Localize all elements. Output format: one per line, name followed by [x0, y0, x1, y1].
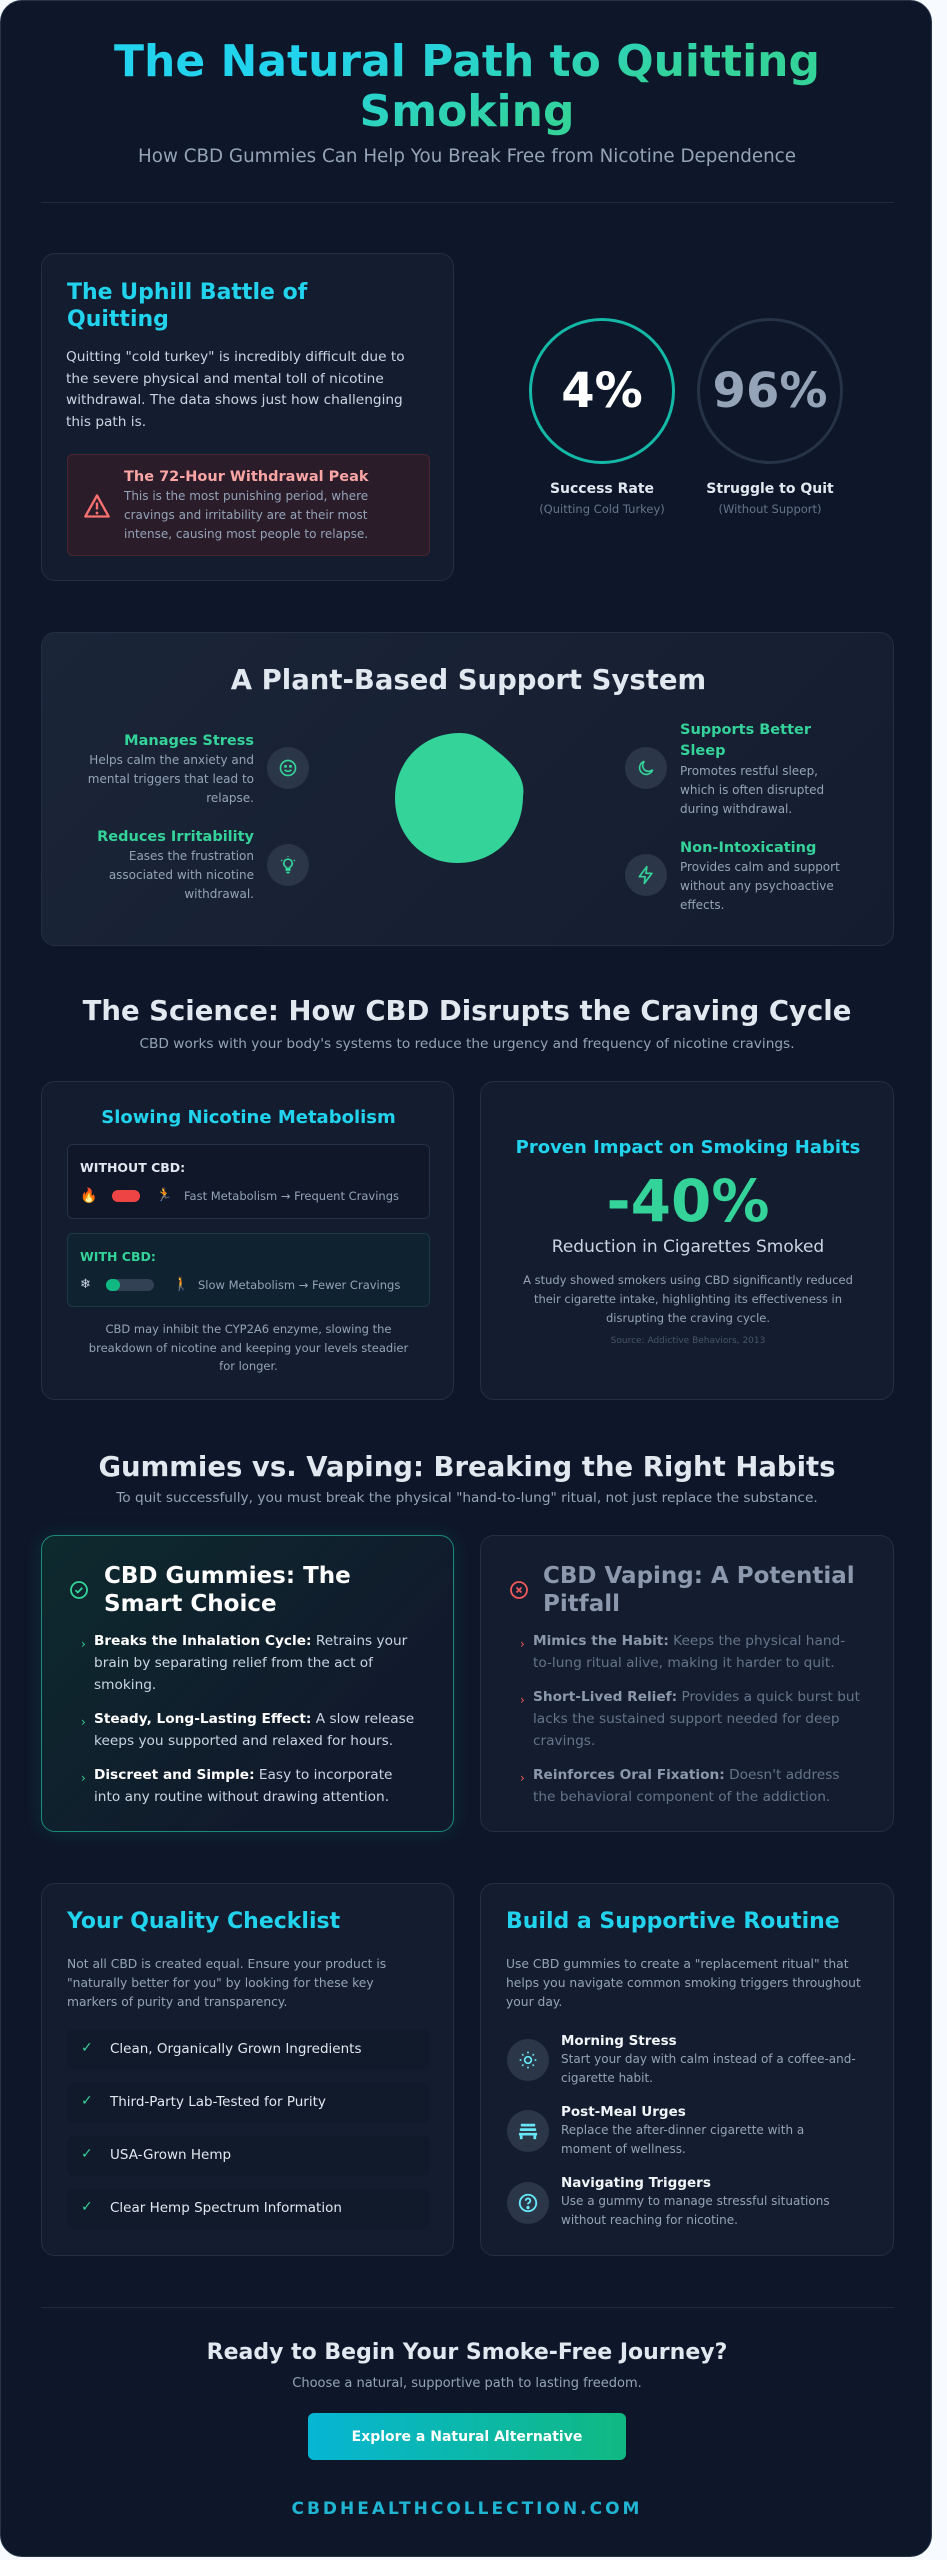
bullets: to-lung ritual alive, making it harder to quit. — [533, 1655, 835, 1671]
feature: manages stress: mental triggers that lead to — [88, 772, 254, 786]
feature: better sleep: during withdrawal. — [680, 802, 792, 816]
feature: non-intoxicating: Non-Intoxicating — [680, 840, 816, 856]
box: without cbd — [67, 1144, 430, 1219]
text: their cigarette intake, highlighting its effectiveness in — [534, 1292, 842, 1306]
routine: morning: Start your day with calm instead of a coffee-and- — [561, 2052, 856, 2066]
feature: manages stress: Helps calm the anxiety and — [89, 753, 254, 767]
heading — [104, 1563, 351, 1617]
bullets: Short-Lived Relief: Provides a quick burst but — [533, 1689, 860, 1705]
routine: post-meal: Replace the after-dinner cigarette with a — [561, 2123, 804, 2137]
stat: -40%: -40% — [607, 1167, 769, 1235]
footnote: CBD may inhibit the CYP2A6 enzyme, slowing the — [106, 1322, 391, 1336]
text: uphill body: this path is. — [66, 414, 146, 430]
callout text: intense, causing most people to relapse. — [124, 527, 368, 541]
icon: sun — [507, 2039, 549, 2081]
panel: uphill battle — [41, 253, 454, 581]
item: spectrum: Clear Hemp Spectrum Information — [110, 2200, 342, 2216]
text: Use CBD gummies to create a "replacement ritual" that — [506, 1957, 849, 1971]
box: with cbd: 🚶 — [173, 1277, 189, 1292]
bullets: Discreet and Simple: Easy to incorporate — [94, 1767, 392, 1783]
feature: better sleep: Promotes restful sleep, — [680, 764, 818, 778]
bullets — [520, 1633, 860, 1805]
title — [1, 37, 933, 137]
heading: uphill: Quitting — [67, 307, 169, 332]
footnote: for longer. — [219, 1359, 278, 1373]
icon: moon — [625, 747, 667, 789]
feature: better sleep: which is often disrupted — [680, 783, 824, 797]
routine: morning: Morning Stress — [561, 2033, 677, 2049]
icon: question — [507, 2182, 549, 2224]
text: uphill body: Quitting "cold turkey" is incredibly difficult due to — [66, 349, 405, 365]
icon: smile — [267, 747, 309, 789]
callout title: The 72-Hour Withdrawal Peak — [124, 469, 369, 485]
subheading: To quit successfully, you must break the physical "hand-to-lung" ritual, not just replace the substance. — [116, 1490, 818, 1506]
bullets: Breaks the Inhalation Cycle: Retrains your — [94, 1633, 407, 1649]
feature: manages stress — [88, 733, 254, 805]
bullets: Steady, Long-Lasting Effect: A slow release — [94, 1711, 414, 1727]
stat: 4% success: 4% — [561, 363, 643, 419]
footer url: CBDHEALTHCOLLECTION.COM — [292, 2499, 642, 2519]
text: "naturally better for you" by looking for these key — [67, 1976, 374, 1990]
box: without cbd: 🏃 — [156, 1188, 172, 1203]
subtitle: How CBD Gummies Can Help You Break Free from Nicotine Dependence — [138, 146, 796, 167]
feature: non-intoxicating: effects. — [680, 898, 724, 912]
subheading: science: CBD works with your body's systems to reduce the urgency and frequency of nicotine cravings. — [139, 1036, 795, 1052]
box: with cbd: ❄ — [80, 1277, 91, 1292]
routine: triggers: without reaching for nicotine. — [561, 2213, 738, 2227]
text — [506, 1957, 861, 2009]
item: organic — [67, 2030, 430, 2070]
icon: x circle — [510, 1581, 528, 1599]
feature: reduces irritability — [97, 829, 254, 901]
routine: morning — [561, 2033, 856, 2085]
callout text: This is the most punishing period, where — [124, 489, 368, 503]
bullets: the behavioral component of the addiction. — [533, 1789, 830, 1805]
bullets: lacks the sustained support needed for deep — [533, 1711, 840, 1727]
label: struggle: (Without Support) — [718, 502, 822, 516]
heading: Pitfall — [543, 1591, 620, 1617]
heading: Slowing Nicotine Metabolism — [101, 1107, 396, 1128]
item: lab tested: ✓ — [81, 2093, 93, 2109]
heading: CBD Gummies: The — [104, 1563, 351, 1589]
routine: post-meal — [561, 2104, 804, 2156]
routine: triggers: Use a gummy to manage stressful situations — [561, 2194, 830, 2208]
feature: non-intoxicating: Provides calm and support — [680, 860, 840, 874]
feature: manages stress: Manages Stress — [124, 733, 254, 749]
item: organic: Clean, Organically Grown Ingredients — [110, 2041, 362, 2057]
text: helps you navigate common smoking triggers throughout — [506, 1976, 861, 1990]
panel: cbd gummies: › — [81, 1715, 86, 1729]
feature: better sleep: Sleep — [680, 743, 725, 759]
text: your day. — [506, 1995, 562, 2009]
source: Source: Addictive Behaviors, 2013 — [611, 1336, 765, 1346]
item: lab tested — [67, 2083, 430, 2123]
item: organic: ✓ — [81, 2040, 93, 2056]
label: struggle: Struggle to Quit — [706, 481, 834, 497]
panel: supportive routine — [480, 1883, 894, 2256]
feature: non-intoxicating: without any psychoactive — [680, 879, 834, 893]
footnote — [89, 1322, 408, 1373]
stat label: Reduction in Cigarettes Smoked — [552, 1237, 824, 1257]
heading: uphill: The Uphill Battle of — [67, 280, 307, 305]
bullets: Mimics the Habit: Keeps the physical hand- — [533, 1633, 845, 1649]
item: spectrum: ✓ — [81, 2199, 93, 2215]
heading: uphill — [67, 280, 308, 332]
bullets — [81, 1633, 414, 1805]
icon: plant blob — [395, 733, 524, 863]
footnote: breakdown of nicotine and keeping your levels steadier — [89, 1340, 408, 1354]
icon: warning — [84, 494, 110, 518]
panel: cbd vaping: › — [520, 1771, 525, 1785]
bullets: brain by separating relief from the act of — [94, 1655, 373, 1671]
text: markers of purity and transparency. — [67, 1995, 287, 2009]
box: with cbd — [67, 1233, 430, 1307]
routine: triggers — [561, 2175, 830, 2227]
callout text: cravings and irritability are at their most — [124, 508, 367, 522]
heading — [543, 1563, 855, 1617]
box: without cbd: WITHOUT CBD: — [80, 1160, 185, 1175]
feature: non-intoxicating — [680, 840, 840, 912]
label: struggle — [706, 481, 834, 516]
button — [308, 2413, 626, 2460]
feature: better sleep: Supports Better — [680, 722, 811, 738]
icon: check circle — [70, 1581, 88, 1599]
feature: reduces irritability: associated with nicotine — [109, 868, 254, 882]
heading: Build a Supportive Routine — [506, 1909, 840, 1934]
panel: cbd vaping — [480, 1535, 894, 1832]
routine: post-meal: Post-Meal Urges — [561, 2104, 686, 2120]
bullets: cravings. — [533, 1733, 595, 1749]
text: Not all CBD is created equal. Ensure your product is — [67, 1957, 386, 1971]
heading: Your Quality Checklist — [67, 1909, 340, 1934]
cta heading: Ready to Begin Your Smoke-Free Journey? — [207, 2340, 727, 2365]
text — [523, 1273, 853, 1325]
heading: science: The Science: How CBD Disrupts the Craving Cycle — [83, 995, 851, 1027]
panel: cbd vaping: › — [520, 1693, 525, 1707]
bullets: keeps you supported and relaxed for hours. — [94, 1733, 393, 1749]
feature: manages stress: relapse. — [206, 791, 254, 805]
bullets: Reinforces Oral Fixation: Doesn't address — [533, 1767, 839, 1783]
routine: triggers: Navigating Triggers — [561, 2175, 711, 2191]
heading: Proven Impact on Smoking Habits — [516, 1137, 860, 1158]
panel: cbd gummies: › — [81, 1771, 86, 1785]
cta subtext: Choose a natural, supportive path to lasting freedom. — [292, 2376, 642, 2391]
routine: post-meal: moment of wellness. — [561, 2142, 686, 2156]
feature: reduces irritability: withdrawal. — [184, 887, 254, 901]
feature: better sleep — [680, 722, 824, 816]
callout text — [124, 489, 368, 541]
bullets: into any routine without drawing attention. — [94, 1789, 389, 1805]
heading: gummies vs vaping: Gummies vs. Vaping: Breaking the Right Habits — [98, 1451, 836, 1483]
feature: reduces irritability: Eases the frustration — [129, 849, 254, 863]
stat: 96% struggle — [697, 318, 843, 464]
panel: cbd gummies: › — [81, 1637, 86, 1651]
text: uphill body: the severe physical and mental toll of nicotine — [66, 371, 384, 387]
icon: bulb — [267, 844, 309, 886]
button: Explore a Natural Alternative — [352, 2428, 582, 2444]
heading: A Plant-Based Support System — [231, 664, 706, 696]
item: usa hemp: USA-Grown Hemp — [110, 2147, 231, 2163]
callout: 72-hour peak — [67, 454, 430, 556]
label: success rate: (Quitting Cold Turkey) — [539, 502, 665, 516]
label: success rate — [539, 481, 665, 516]
feature: reduces irritability: Reduces Irritability — [97, 829, 254, 845]
panel: slowing metabolism — [41, 1081, 454, 1400]
text: uphill body — [66, 349, 405, 430]
text — [67, 1957, 386, 2009]
box: with cbd: Slow Metabolism → Fewer Cravings — [198, 1278, 400, 1292]
panel: proven impact — [480, 1081, 894, 1400]
heading: Smart Choice — [104, 1591, 277, 1617]
title: The Natural Path to Quitting — [114, 36, 820, 87]
routine: morning: cigarette habit. — [561, 2071, 653, 2085]
box: without cbd: 🔥 — [80, 1188, 97, 1204]
title: Smoking — [360, 86, 574, 137]
panel: plant-based support — [41, 632, 894, 946]
item: usa hemp — [67, 2136, 430, 2176]
box: without cbd: Fast Metabolism → Frequent Cravings — [184, 1189, 399, 1203]
label: success rate: Success Rate — [550, 481, 654, 497]
stat: 96% struggle: 96% — [713, 363, 827, 419]
item: usa hemp: ✓ — [81, 2146, 93, 2162]
icon: meal — [507, 2110, 549, 2152]
icon: bolt — [625, 854, 667, 896]
text: uphill body: withdrawal. The data shows just how challenging — [66, 392, 403, 408]
stat: 4% success — [529, 318, 675, 464]
box: with cbd: WITH CBD: — [80, 1249, 156, 1264]
item: lab tested: Third-Party Lab-Tested for Purity — [110, 2094, 326, 2110]
panel: quality checklist — [41, 1883, 454, 2256]
heading: CBD Vaping: A Potential — [543, 1563, 855, 1589]
text: disrupting the craving cycle. — [606, 1311, 770, 1325]
bullets: smoking. — [94, 1677, 156, 1693]
item: spectrum — [67, 2189, 430, 2229]
panel: cbd gummies — [41, 1535, 454, 1832]
text: A study showed smokers using CBD significantly reduced — [523, 1273, 853, 1287]
panel: cbd vaping: › — [520, 1637, 525, 1651]
